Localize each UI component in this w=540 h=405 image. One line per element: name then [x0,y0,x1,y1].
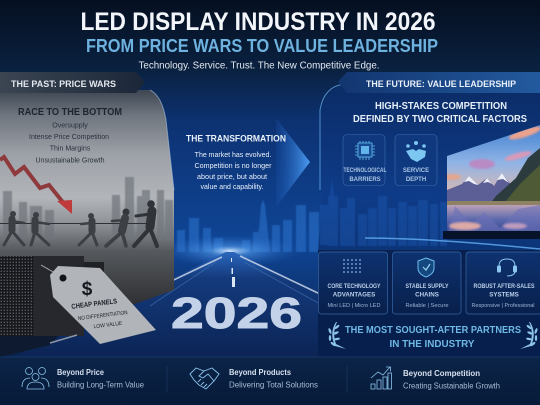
high-stakes heading: HIGH-STAKES COMPETITION [375,100,507,112]
transformation text [186,134,286,191]
light streak [365,238,540,249]
gray city skyline [3,177,173,240]
panel: the past [0,72,174,305]
supply text: STABLE SUPPLY [406,283,449,290]
supply text: Reliable | Secure [406,303,448,309]
future panel fill [318,84,540,357]
transformation arrow [276,118,310,207]
panel outline highlight [150,90,174,190]
beyond price [22,368,145,390]
supply text: CHAINS [415,292,439,298]
figure 5 [134,200,157,246]
figure 3 [79,213,97,245]
icon: headset [498,259,516,276]
road centre dashes [231,258,235,287]
tag text: CHEAP PANELS [71,298,118,311]
transformation text: The market has evolved. [195,152,271,159]
race to the bottom list [29,122,109,164]
tag text [71,297,129,333]
race to the bottom list: Intense Price Competition [29,134,109,141]
partners callout: THE MOST SOUGHT-AFTER PARTNERS [345,324,521,336]
service label: SERVICE [403,168,429,174]
service label: DEPTH [406,177,426,183]
after-sales text: Responsive | Professional [472,303,534,309]
blue city skyline [320,178,447,246]
header [80,8,438,72]
beyond competition: Beyond Competition [403,369,480,378]
partners callout [328,322,538,350]
core text [328,283,381,309]
past ribbon [0,72,145,93]
price tag [41,265,156,344]
service label [403,168,429,183]
high-stakes heading [353,100,527,125]
tug of war silhouettes [0,200,157,246]
after-sales text [472,283,534,309]
icon: people [22,368,49,389]
icon: led dot grid [343,259,361,273]
core text: Mini LED | Micro LED [328,303,381,309]
road inner lines [150,262,320,306]
race to the bottom list: Oversupply [52,122,88,130]
subtitle: FROM PRICE WARS TO VALUE LEADERSHIP [86,36,438,56]
lower dark area [318,250,540,357]
tag text: NO DIFFERENTIATION [78,310,128,322]
icon: service handshake [406,141,426,162]
core text: CORE TECHNOLOGY [328,283,381,290]
LED panels [0,256,104,336]
falling red arrow [0,157,72,214]
icon: growth chart [371,367,392,389]
beyond price: Building Long-Term Value [57,380,145,390]
clouds [443,124,540,180]
race to the bottom list: Unsustainable Growth [36,158,105,164]
card: robust after-sales [466,252,540,314]
card: service depth [395,134,437,186]
tech label: BARRIERS [349,177,381,183]
beyond products [190,368,318,390]
icon: right laurel [520,322,538,349]
road edge lines [60,256,320,334]
transformation text: Competition is no longer [194,163,272,170]
panel: the future [318,72,540,357]
core text: ADVANTAGES [333,292,375,298]
tag text: LOW VALUE [93,321,123,330]
future ribbon [338,72,540,93]
figure 2 [31,212,49,245]
icon: handshake [190,368,219,389]
horizon glow [160,235,300,267]
LED TV display [443,124,540,239]
card: stable supply [392,252,461,314]
after-sales text: SYSTEMS [489,292,519,298]
foreground road line [50,335,77,343]
tagline: Technology. Service. Trust. The New Competitive Edge. [138,60,380,72]
road year 2026: 2026 [171,289,302,338]
transformation text: value and capability. [201,184,264,191]
transformation text: about price, but about [197,174,267,181]
tech label: TECHNOLOGICAL [344,168,387,174]
transformation text: THE TRANSFORMATION [186,134,286,144]
tech label [344,168,387,183]
figure 4 [106,208,130,246]
future ribbon: THE FUTURE: VALUE LEADERSHIP [366,79,517,90]
title: LED DISPLAY INDUSTRY IN 2026 [80,8,436,36]
dollar sign: $ [82,279,93,300]
icon: shield [418,258,434,277]
race to the bottom heading: RACE TO THE BOTTOM [18,106,122,118]
road [13,252,453,357]
partners callout: IN THE INDUSTRY [390,338,474,350]
beyond price: Beyond Price [57,368,104,377]
figure 1 [4,211,24,245]
supply text [406,283,449,309]
card: core technology [318,252,388,314]
icon: chip [355,141,375,160]
beyond products: Beyond Products [229,368,292,377]
icon: left laurel [328,322,346,349]
past ribbon: THE PAST: PRICE WARS [11,79,116,90]
race to the bottom list: Thin Margins [50,146,91,152]
lake [447,205,540,231]
beyond competition [371,367,500,390]
dark ground below panels [0,300,60,357]
bottom band [0,357,540,405]
beyond products: Delivering Total Solutions [229,380,318,390]
mountains [447,173,512,202]
beyond competition: Creating Sustainable Growth [403,382,500,390]
card: technological barriers [343,134,387,186]
center city skyline [177,200,319,252]
